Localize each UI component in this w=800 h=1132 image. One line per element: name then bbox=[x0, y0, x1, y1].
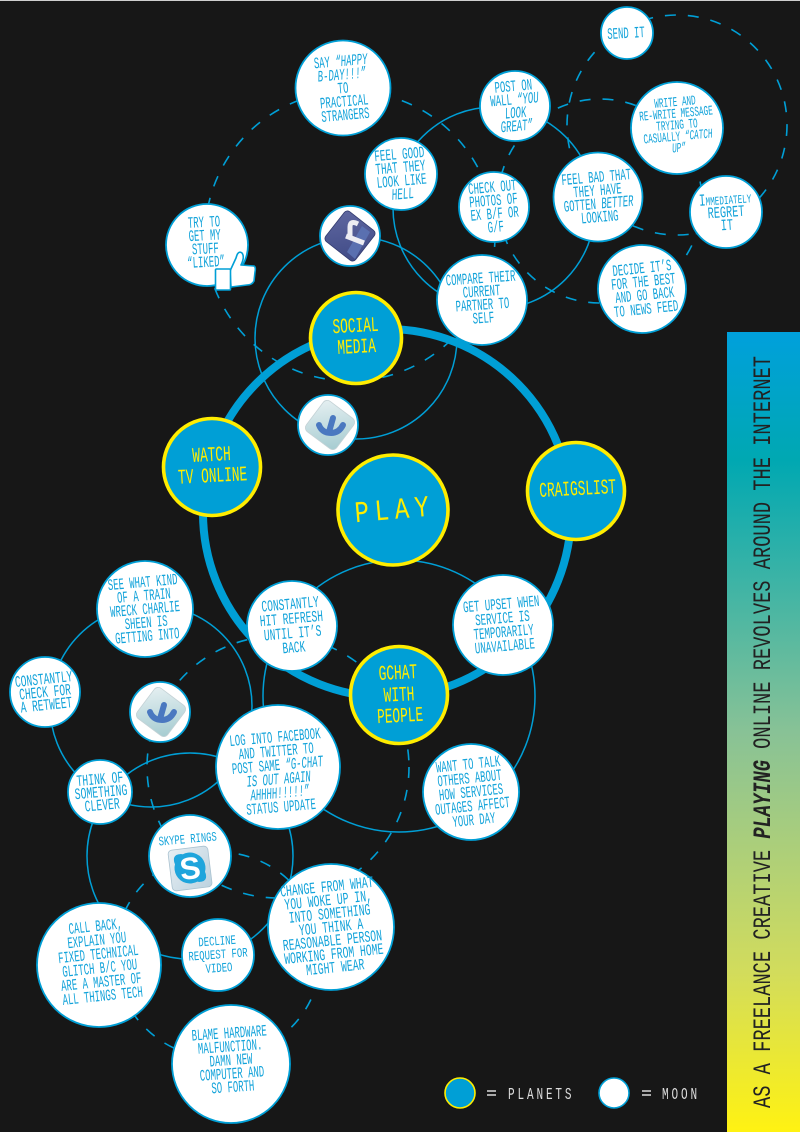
moon: constantly check for a retweet bbox=[10, 657, 80, 727]
moon: feel good that they look like hell bbox=[365, 138, 437, 210]
moon: want to talk to others: WANT TO TALK bbox=[435, 752, 501, 777]
banner text: AS A FREELANCE CREATIVE PLAYING ONLINE REVOLVES AROUND THE INTERNET bbox=[749, 356, 778, 1108]
moon: log into facebook and twitter: AND TWITTER TO bbox=[238, 739, 315, 764]
moon: write and re-write message: UP” bbox=[672, 141, 687, 157]
icon: skype: S bbox=[178, 850, 202, 887]
moon: log into facebook and twitter: LOG INTO FACEBOOK bbox=[229, 725, 321, 751]
moon: charlie sheen train wreck: SHEEN IS bbox=[124, 612, 169, 634]
moon: say happy b-day: STRANGERS bbox=[321, 104, 370, 127]
moon: want to talk to others bbox=[423, 744, 519, 840]
moon: immediately regret it: Immediately bbox=[698, 189, 752, 212]
moon: blame hardware malfunction: BLAME HARDWARE bbox=[191, 1022, 267, 1046]
planet: craigslist bbox=[528, 442, 624, 540]
moon: feel good that they look like hell: FEEL GOOD bbox=[374, 143, 425, 166]
moon: compare their current partner to self bbox=[437, 255, 527, 345]
moon: skype rings bbox=[149, 815, 231, 897]
moon: feel good that they look like hell: THAT THEY bbox=[375, 157, 426, 179]
moon: say happy b-day: TO bbox=[337, 79, 349, 98]
moon: call back explain: FIXED TECHNICAL bbox=[57, 941, 139, 968]
moon: log into facebook and twitter: IS OUT AGAIN bbox=[246, 768, 312, 792]
icon: facebook bbox=[323, 209, 377, 263]
moon: check out photos of ex: CHECK OUT bbox=[467, 176, 517, 199]
moon: constantly hit refresh: UNTIL IT’S bbox=[263, 622, 322, 645]
moon: charlie sheen train wreck: WRECK CHARLIE bbox=[109, 597, 181, 622]
moon: decline request for video bbox=[182, 919, 254, 991]
moon: call back explain bbox=[37, 903, 161, 1027]
moon: change from what you woke up in: MIGHT WEAR bbox=[305, 956, 365, 980]
moon: post on wall: WALL “YOU bbox=[490, 89, 540, 111]
moon: write and re-write message: WRITE AND bbox=[654, 94, 697, 113]
planet: watch tv online: WATCH bbox=[192, 444, 231, 469]
moon: change from what you woke up in: YOU WOKE UP IN, bbox=[284, 887, 373, 915]
legend: planets bbox=[445, 1078, 574, 1108]
moon: blame hardware malfunction bbox=[172, 1005, 290, 1123]
moon: log into facebook and twitter: POST SAME “G-CHAT bbox=[231, 752, 325, 779]
side banner bbox=[727, 332, 800, 1132]
moon: get upset when service is unavailable bbox=[453, 575, 553, 675]
moon: call back explain: CALL BACK, bbox=[68, 915, 123, 939]
legend: moon: MOON bbox=[662, 1086, 700, 1105]
moon: decide it's for the best: TO NEWS FEED bbox=[613, 297, 679, 322]
moon: constantly check for a retweet: CHECK FOR bbox=[18, 681, 72, 705]
moon: change from what you woke up in bbox=[268, 864, 394, 990]
moon: decide it's for the best: DECIDE IT’S bbox=[612, 256, 672, 281]
moon: say happy b-day bbox=[296, 40, 390, 136]
moon: check out photos of ex: EX B/F OR bbox=[470, 203, 520, 226]
moon: feel bad that they have gotten better looking: LOOKING bbox=[580, 207, 619, 228]
moon: post on wall bbox=[480, 71, 550, 141]
moon: constantly hit refresh: HIT REFRESH bbox=[259, 607, 324, 631]
moon: want to talk to others: YOUR DAY bbox=[452, 809, 496, 832]
moon: change from what you woke up in: YOU THINK A bbox=[298, 915, 364, 940]
moon: check out photos of ex: G/F bbox=[487, 218, 505, 238]
moon: try to get my stuff liked: GET MY bbox=[188, 226, 221, 246]
moon: decline request for video: REQUEST FOR bbox=[188, 947, 248, 965]
planet: gchat with people bbox=[350, 646, 448, 744]
planet: craigslist: CRAIGSLIST bbox=[539, 477, 617, 504]
planet: gchat with people: PEOPLE bbox=[377, 705, 424, 730]
moon: post on wall: LOOK bbox=[504, 103, 528, 124]
moon: get upset when service is unavailable: TEMPORARILY bbox=[473, 621, 535, 644]
moon: immediately regret it: REGRET bbox=[707, 204, 745, 224]
moon: log into facebook and twitter bbox=[216, 705, 340, 829]
moon: constantly hit refresh bbox=[247, 581, 337, 671]
planet: social media: SOCIAL bbox=[332, 315, 379, 340]
moon: write and re-write message: TRYING TO bbox=[656, 117, 699, 136]
moon: blame hardware malfunction: COMPUTER AND bbox=[199, 1063, 265, 1086]
moon: log into facebook and twitter: AHHHH!!!!!” bbox=[249, 782, 310, 805]
moon: feel bad that they have gotten better looking: THEY HAVE bbox=[573, 180, 623, 202]
moon: immediately regret it: IT bbox=[720, 218, 734, 236]
moon: try to get my stuff liked: TRY TO bbox=[187, 213, 221, 233]
moon: twitter icon near social media bbox=[298, 395, 358, 455]
moon: skype rings: SKYPE RINGS bbox=[158, 831, 218, 850]
planet: social media bbox=[310, 292, 402, 384]
icon: twitter bbox=[303, 398, 357, 452]
moon: change from what you woke up in: REASONABLE PERSON bbox=[282, 927, 383, 955]
planet: gchat with people: GCHAT bbox=[378, 662, 418, 687]
moon: say happy b-day: SAY “HAPPY bbox=[313, 50, 369, 73]
moon: get upset when service is unavailable: UNAVAILABLE bbox=[474, 635, 536, 658]
moon: feel bad that they have gotten better looking bbox=[554, 152, 642, 242]
main orbit ring bbox=[203, 329, 571, 697]
moon: check out photos of ex bbox=[459, 172, 529, 242]
moon: want to talk to others: HOW SERVICES bbox=[438, 780, 504, 805]
moon: try to get my stuff liked bbox=[166, 204, 255, 290]
moon: blame hardware malfunction: SO FORTH bbox=[211, 1077, 255, 1098]
moon: blame hardware malfunction: DAMN NEW bbox=[209, 1050, 253, 1071]
moon: write and re-write message: CASUALLY “CATCH bbox=[643, 128, 714, 148]
planet: social media: MEDIA bbox=[337, 336, 377, 361]
moon: feel good that they look like hell: HELL bbox=[391, 185, 415, 205]
moon: decide it's for the best bbox=[598, 245, 686, 333]
moon: charlie sheen train wreck: SEE WHAT KIND bbox=[107, 571, 178, 595]
moon: think of something clever: CLEVER bbox=[84, 795, 121, 816]
moon: say happy b-day: PRACTICAL bbox=[319, 91, 369, 113]
icon: thumbs up bbox=[216, 252, 255, 290]
moon: call back explain: GLITCH B/C YOU bbox=[61, 956, 138, 982]
moon: blame hardware malfunction: MALFUNCTION. bbox=[197, 1036, 263, 1059]
moon: send it bbox=[601, 7, 653, 59]
moon: post on wall: POST ON bbox=[494, 76, 533, 98]
moon: constantly check for a retweet: A RETWEET bbox=[20, 694, 73, 717]
moon: feel good that they look like hell: LOOK LIKE bbox=[376, 170, 427, 193]
planet: play bbox=[338, 455, 448, 565]
moon: immediately regret it bbox=[690, 176, 762, 248]
moon: constantly hit refresh: CONSTANTLY bbox=[261, 593, 320, 616]
moon: say happy b-day: B-DAY!!!” bbox=[317, 64, 367, 87]
moon: change from what you woke up in: CHANGE FROM WHAT bbox=[279, 874, 374, 901]
moon: think of something clever bbox=[68, 760, 132, 824]
moon: compare their current partner to self: CURRENT bbox=[462, 281, 501, 303]
moon: think of something clever: SOMETHING bbox=[74, 781, 128, 804]
moon: post on wall: GREAT” bbox=[500, 116, 534, 137]
icon: twitter bbox=[134, 685, 188, 739]
moon: charlie sheen train wreck bbox=[97, 561, 193, 657]
moon: feel bad that they have gotten better looking: FEEL BAD THAT bbox=[561, 165, 632, 190]
moon: decide it's for the best: FOR THE BEST bbox=[610, 270, 677, 295]
orbit lines: dashed moon orbits bbox=[115, 15, 787, 1058]
moon: feel bad that they have gotten better looking: GOTTEN BETTER bbox=[563, 192, 634, 217]
moon: try to get my stuff liked: STUFF bbox=[191, 239, 219, 259]
moon: want to talk to others: OUTAGES AFFECT bbox=[434, 793, 511, 820]
moon: constantly check for a retweet: CONSTANTLY bbox=[14, 668, 73, 692]
moon: constantly hit refresh: BACK bbox=[282, 638, 306, 658]
moon: decline request for video: DECLINE bbox=[198, 934, 237, 951]
moon: call back explain: ARE A MASTER OF bbox=[60, 969, 142, 996]
moon: get upset when service is unavailable: GET UPSET WHEN bbox=[462, 592, 540, 617]
planet: play: PLAY bbox=[353, 491, 436, 532]
moon: compare their current partner to self: PARTNER TO bbox=[455, 294, 510, 316]
moon: write and re-write message bbox=[631, 82, 723, 174]
moon: check out photos of ex: PHOTOS OF bbox=[469, 190, 518, 212]
moon: decline request for video: VIDEO bbox=[205, 962, 233, 978]
moon: charlie sheen train wreck: OF A TRAIN bbox=[116, 585, 171, 608]
moon: send it: SEND IT bbox=[607, 23, 645, 44]
moon: twitter icon lower bbox=[130, 682, 190, 742]
moon: facebook icon bbox=[320, 206, 380, 266]
moon: want to talk to others: OTHERS ABOUT bbox=[437, 766, 503, 791]
planet: gchat with people: WITH bbox=[383, 685, 415, 709]
moon: think of something clever: THINK OF bbox=[76, 769, 124, 791]
legend: moon bbox=[599, 1078, 700, 1108]
moon: call back explain: EXPLAIN YOU bbox=[67, 929, 127, 953]
moon: charlie sheen train wreck: GETTING INTO bbox=[115, 625, 180, 649]
legend: planets: PLANETS bbox=[508, 1086, 574, 1105]
orbit lines: solid moon orbits bbox=[50, 107, 595, 959]
moon: get upset when service is unavailable: SERVICE IS bbox=[474, 607, 531, 630]
planet: watch tv online bbox=[164, 418, 260, 516]
planet: watch tv online: TV ONLINE bbox=[178, 464, 248, 491]
moon: change from what you woke up in: INTO SOMETHING bbox=[288, 901, 371, 928]
moon: try to get my stuff liked: “LIKED” bbox=[187, 252, 225, 273]
moon: compare their current partner to self: SELF bbox=[472, 309, 495, 329]
moon: write and re-write message: RE-WRITE MESSAGE bbox=[639, 104, 714, 126]
moon: change from what you woke up in: WORKING FROM HOME bbox=[283, 940, 384, 969]
moon: decide it's for the best: AND GO BACK bbox=[614, 283, 675, 308]
legend bbox=[445, 1078, 700, 1108]
moon: log into facebook and twitter: STATUS UPDATE bbox=[246, 795, 317, 820]
moon: call back explain: ALL THINGS TECH bbox=[62, 983, 144, 1010]
moon: compare their current partner to self: COMPARE THEIR bbox=[445, 267, 516, 290]
